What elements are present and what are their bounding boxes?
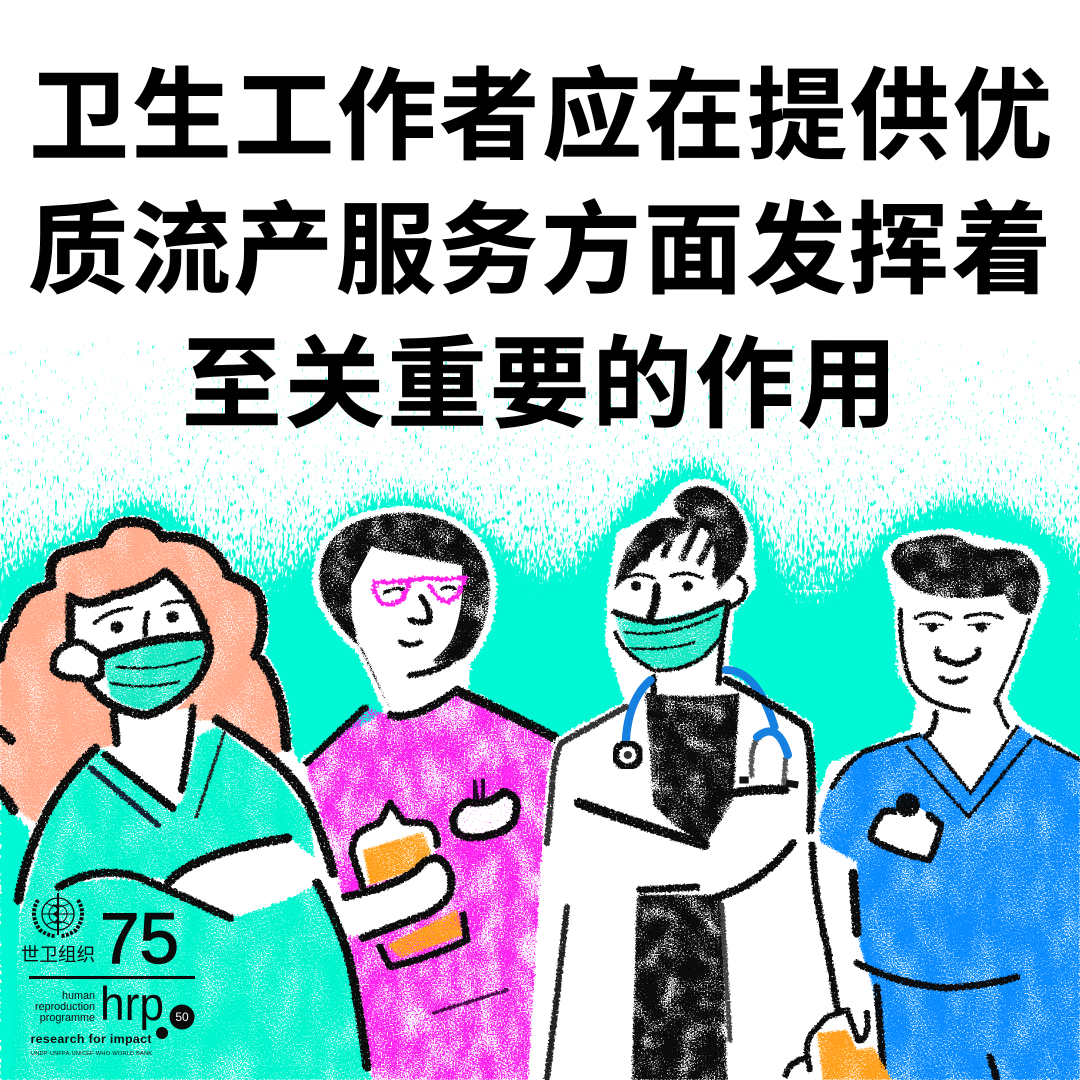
HRP programme name: programme — [40, 1012, 95, 1024]
HRP wordmark: hrp — [100, 977, 164, 1030]
hair fill — [0, 522, 286, 822]
HRP 50 badge: 50 — [175, 1010, 189, 1024]
title: 质流产服务方面发挥着 — [28, 195, 1054, 307]
stethoscope — [615, 670, 798, 785]
black shirt lower — [632, 895, 727, 1080]
mask — [614, 600, 725, 668]
divider rule — [29, 976, 195, 979]
figure: doctor in white coat with stethoscope — [535, 485, 892, 1080]
logo block: WHO 75 and HRP 50 — [21, 893, 195, 1057]
HRP programme name: reproduction — [35, 1001, 95, 1013]
white folded arm — [59, 838, 450, 938]
facial features — [384, 587, 456, 675]
badge — [453, 780, 517, 838]
hair fill and outline — [0, 522, 286, 822]
face strokes — [53, 572, 210, 715]
scrub top — [10, 727, 372, 1080]
tagline: research for impact — [30, 1032, 152, 1046]
lower scrub strokes — [853, 873, 1017, 1080]
collar strokes — [19, 707, 225, 900]
glasses — [374, 577, 466, 605]
blue shirt — [817, 725, 1080, 1080]
halo around head and shoulders — [817, 537, 1080, 1080]
HRP programme name: human — [62, 990, 95, 1002]
head details — [19, 572, 225, 900]
title: 至关重要的作用 — [182, 329, 900, 441]
hair — [320, 513, 490, 715]
partner line: UNDP·UNFPA·UNICEF·WHO·WORLD BANK — [31, 1051, 152, 1057]
hand gripping clipboard — [345, 858, 451, 938]
collar and shoulder strokes — [307, 690, 555, 763]
black shirt upper — [645, 693, 739, 845]
HRP programme name — [35, 990, 95, 1024]
HRP 50 badge — [170, 1004, 194, 1030]
mask — [103, 638, 204, 710]
WHO name: 世卫组织 — [21, 944, 95, 965]
figure: health worker with pink glasses and magenta top — [300, 513, 567, 1080]
HRP dot — [156, 1027, 168, 1039]
hair outline — [0, 522, 286, 810]
75 anniversary numerals: 75 — [100, 900, 179, 979]
halo around hair and body — [0, 522, 367, 1080]
badge — [871, 793, 941, 860]
head and collar — [307, 513, 555, 763]
halo around head and coat — [535, 485, 880, 1080]
faint stroke on shirt — [433, 990, 507, 1013]
hair — [614, 486, 748, 590]
title: 卫生工作者应在提供优 — [29, 61, 1055, 173]
title — [28, 61, 1055, 441]
magenta shirt — [307, 692, 567, 1080]
collar and shoulder strokes — [832, 727, 1080, 817]
face and neck — [902, 590, 1029, 793]
head and collar — [832, 535, 1080, 817]
halo around head and shoulders — [300, 513, 560, 1080]
coat strokes — [547, 680, 838, 1078]
background: teal chalk wash with sprayed edge — [0, 340, 1080, 1080]
face and neck — [351, 546, 462, 716]
head and upper shirt — [614, 486, 798, 845]
body strokes — [59, 720, 367, 1067]
face, neck and ear — [52, 572, 210, 810]
figure: health worker in blue scrubs — [817, 535, 1080, 1080]
figure: health worker with long hair, green mask and clipboard — [0, 522, 467, 1080]
orange bag in hand — [786, 1010, 892, 1080]
hair — [891, 535, 1040, 615]
clipboard — [352, 803, 467, 967]
solid teal below the figure — [0, 800, 30, 1080]
hair bangs — [629, 520, 722, 575]
facial features and mask strokes — [614, 573, 746, 693]
icon: WHO emblem — [34, 893, 82, 936]
facial features — [900, 610, 1029, 737]
